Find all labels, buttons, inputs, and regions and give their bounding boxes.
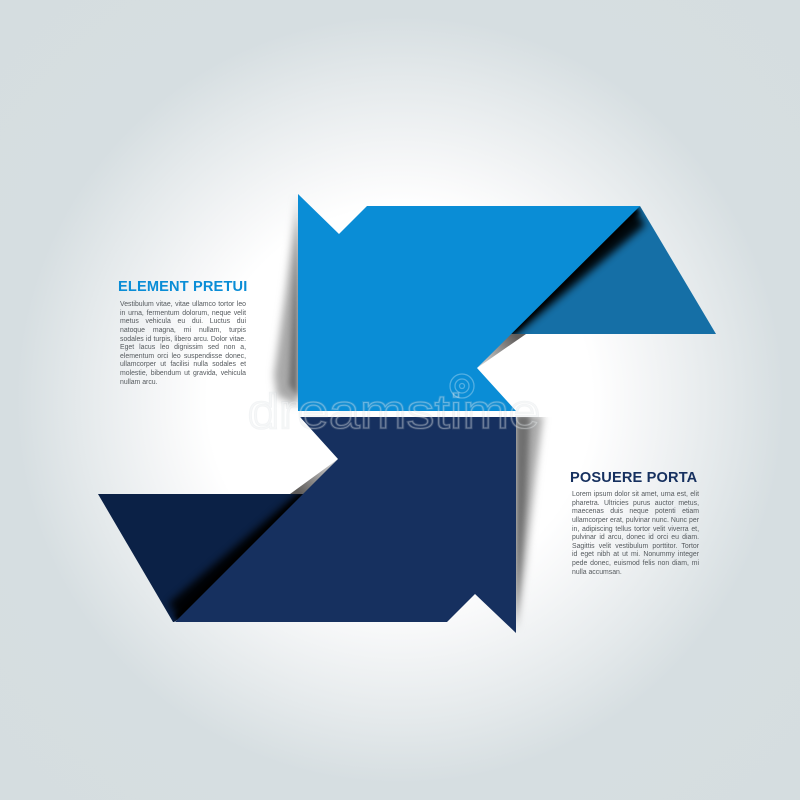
watermark: dreamstime — [248, 386, 540, 439]
text block: right body: pede donec, euismod felis non diam, mi — [572, 560, 699, 567]
text block: left body: sodales id turpis, libero arcu. Dolor vitae. — [120, 336, 246, 342]
fold shadow: blue — [500, 200, 645, 334]
text block: right body: id eget nibh at ut mi. Nonummy integer — [572, 551, 699, 558]
text block: left body: in urna, fermentum dolorum, neque velit — [120, 310, 246, 317]
text block: right body — [572, 490, 699, 576]
heading: element pretui: ELEMENT PRETUI — [118, 279, 247, 295]
text block: left body: molestie, bibendum ut gravida, vehicula — [120, 370, 246, 377]
fold shadow: navy — [166, 494, 303, 622]
watermark spiral — [450, 374, 474, 398]
text block: right body: maecenas duis neque potenti etiam — [572, 508, 699, 515]
text block: right body: nulla accumsan. — [572, 569, 622, 576]
shadow: right of navy panel — [516, 415, 543, 633]
text block: right body: pharetra. Ultricies purus auctor metus, — [572, 500, 699, 507]
text block: right body: in, adipiscing tellus tortor velit viverra et, — [572, 526, 699, 532]
text block: left body: natoque magna, mi nullam, turpis — [120, 327, 246, 334]
text block: right body: Lorem ipsum dolor sit amet, urna est, elit — [572, 491, 699, 498]
text block: left body — [120, 300, 246, 386]
blue back fold triangle — [500, 200, 716, 334]
text block: right body: ullamcorper erat, pulvinar nunc. Nunc per — [572, 517, 699, 524]
text block: left body: nullam arcu. — [120, 379, 158, 386]
shadow: left of blue panel — [274, 194, 298, 406]
blue front panel — [298, 194, 640, 411]
navy back fold triangle — [98, 494, 303, 622]
text block: left body: Eget lacus leo dignissim sed non a, — [120, 344, 246, 351]
text block: left body: metus vehicula eu dui. Luctus dui — [120, 318, 246, 325]
fold gap shadow: blue — [477, 334, 526, 368]
navy front panel — [175, 417, 516, 633]
text block: left body: ullamcorper ut facilisi nulla sodales et — [120, 361, 246, 368]
text block: left body: Vestibulum vitae, vitae ullamco tortor leo — [120, 301, 246, 308]
text block: right body: pulvinar id arcu, donec id orci eu diam. — [572, 534, 699, 541]
text block: left body: elementum orci leo suspendisse donec, — [120, 353, 246, 360]
text block: right body: Sagittis velit vestibulum porttitor. Tortor — [572, 543, 699, 550]
heading: posuere porta: POSUERE PORTA — [570, 470, 697, 486]
fold gap shadow: navy — [290, 459, 338, 494]
watermark: dreamstime — [248, 386, 540, 439]
